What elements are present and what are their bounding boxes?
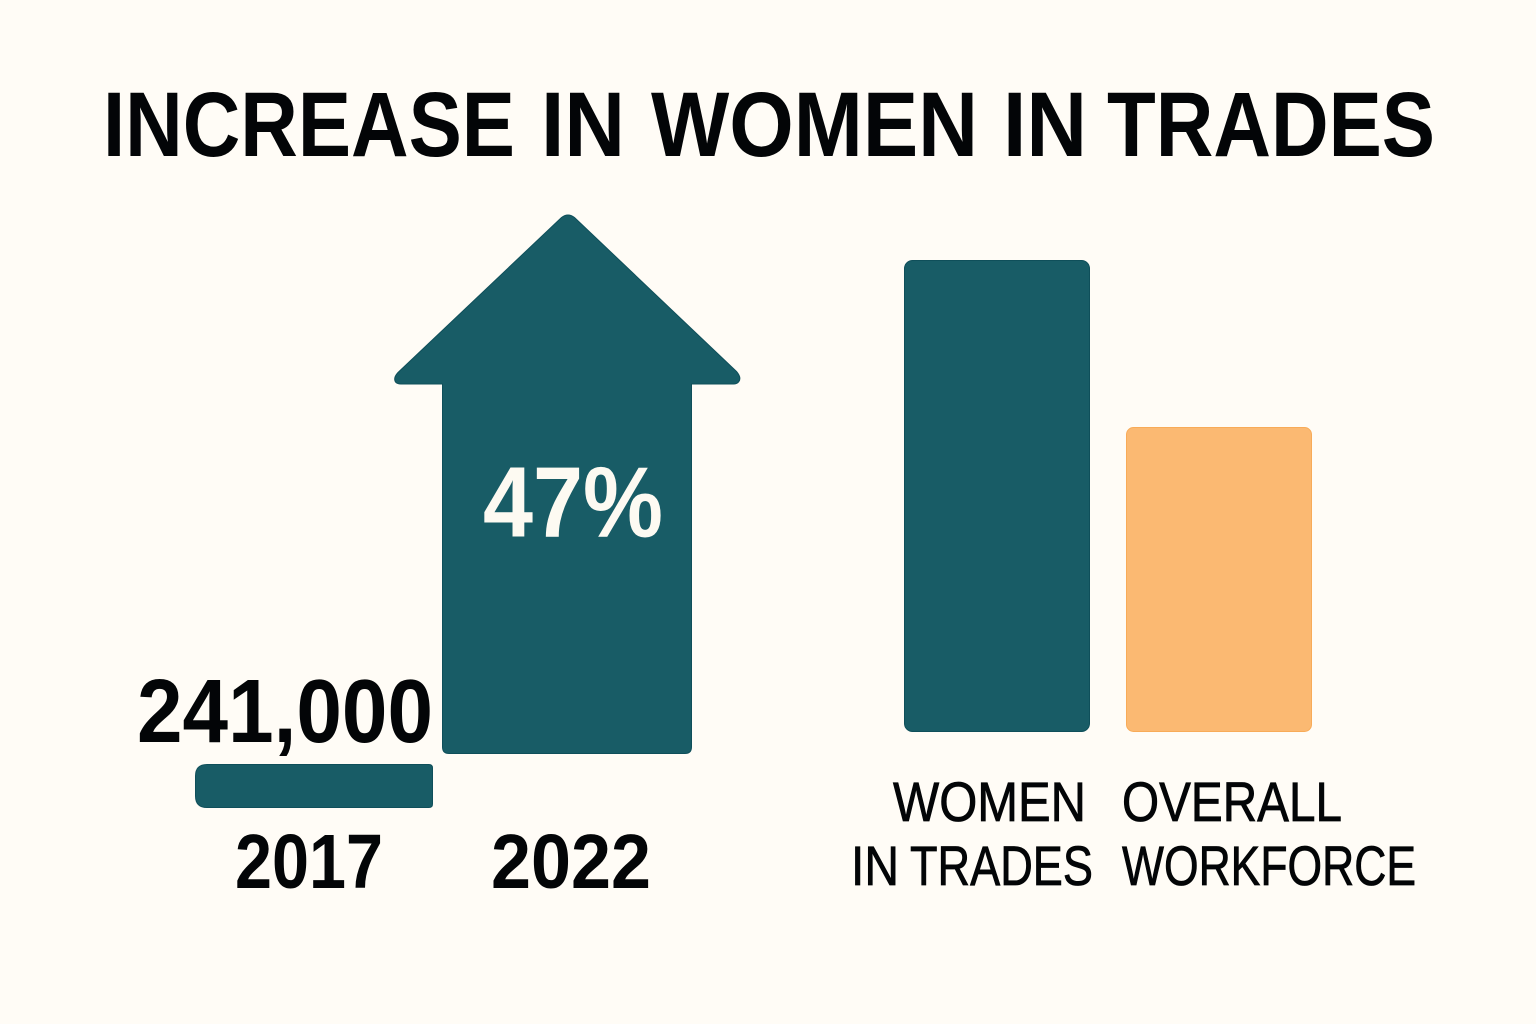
label: women in trades [851, 770, 1093, 897]
bar: 2017 [196, 764, 432, 808]
title: IN [1003, 74, 1087, 176]
year label 2017: 2017 [235, 819, 383, 905]
title: TRADES [1107, 74, 1435, 176]
label: overall workforce: OVERALL [1122, 770, 1342, 833]
label: overall workforce: WORKFORCE [1122, 834, 1416, 897]
value label 2017: 241,000 [137, 662, 433, 762]
title: IN [541, 74, 625, 176]
year label 2022: 2022 [491, 819, 651, 905]
bar: women in trades [904, 260, 1090, 732]
title: INCREASE [103, 74, 515, 176]
percentage label: 47% [483, 446, 663, 558]
label: women in trades: WOMEN [893, 770, 1086, 833]
label: women in trades: TRADES [910, 834, 1093, 897]
icon: up arrow 2022 [395, 215, 740, 754]
label: overall workforce [1122, 770, 1416, 897]
title [103, 74, 1435, 176]
title: WOMEN [651, 74, 978, 176]
label: women in trades: IN [851, 834, 899, 897]
bar: overall workforce [1126, 428, 1312, 732]
